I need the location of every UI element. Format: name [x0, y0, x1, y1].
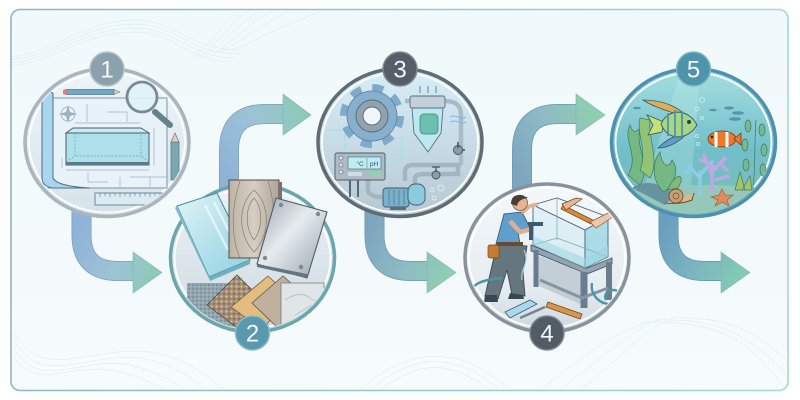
metal plate	[257, 198, 327, 278]
angelfish	[643, 100, 697, 148]
ruler	[95, 193, 167, 205]
badge: step 5	[676, 52, 710, 86]
snail	[665, 189, 694, 203]
badge: step 1	[90, 52, 124, 86]
panel: step 1 blueprint	[25, 68, 189, 216]
pipes and pump	[368, 142, 465, 210]
level and hands	[560, 198, 612, 228]
arrow: step 5 onward	[668, 205, 750, 293]
tools	[505, 300, 582, 319]
hoses	[472, 250, 622, 304]
tank drawing	[66, 128, 149, 165]
glass sheet	[175, 193, 250, 281]
badge: step 5: 5	[687, 56, 700, 84]
panel: step 5 finished aquarium	[610, 68, 780, 220]
pencil	[63, 90, 120, 94]
badge: step 2	[236, 316, 270, 350]
panel: step 4 assembly	[465, 184, 629, 332]
plant right	[735, 120, 767, 195]
badge: step 4	[530, 316, 564, 350]
badge: step 1: 1	[100, 56, 114, 84]
clownfish	[708, 131, 741, 147]
worker	[484, 195, 543, 302]
control panel	[335, 153, 385, 197]
starfish	[711, 189, 733, 206]
coral	[685, 155, 728, 195]
blueprint roll	[42, 92, 90, 188]
arrow: step 4 to 5	[522, 94, 605, 195]
badge: step 2: 2	[246, 320, 259, 348]
arrow: step 1 to 2	[82, 205, 162, 293]
badge: step 3	[383, 52, 417, 86]
panel: step 3 filtration	[318, 68, 482, 216]
rock	[632, 182, 670, 205]
small fish school	[633, 106, 744, 121]
wood plank	[229, 180, 282, 258]
panel: step 2 materials	[170, 180, 334, 332]
badge: step 4: 4	[540, 320, 554, 348]
bubbles	[695, 98, 704, 146]
control panel: pH	[370, 161, 378, 168]
plants left	[628, 118, 681, 192]
stand	[531, 245, 612, 308]
blueprint sheet	[48, 98, 167, 188]
control panel: °C	[356, 160, 364, 168]
glass tank	[533, 198, 608, 268]
stone samples	[187, 275, 324, 330]
gear	[344, 88, 400, 144]
sand	[635, 185, 754, 214]
arrow: step 3 to 4	[374, 205, 456, 293]
magnifying glass	[127, 82, 170, 125]
badge: step 3: 3	[393, 56, 407, 84]
arrow: step 2 to 3	[229, 94, 311, 195]
upright pencil	[171, 133, 179, 180]
filter canister	[405, 86, 466, 165]
